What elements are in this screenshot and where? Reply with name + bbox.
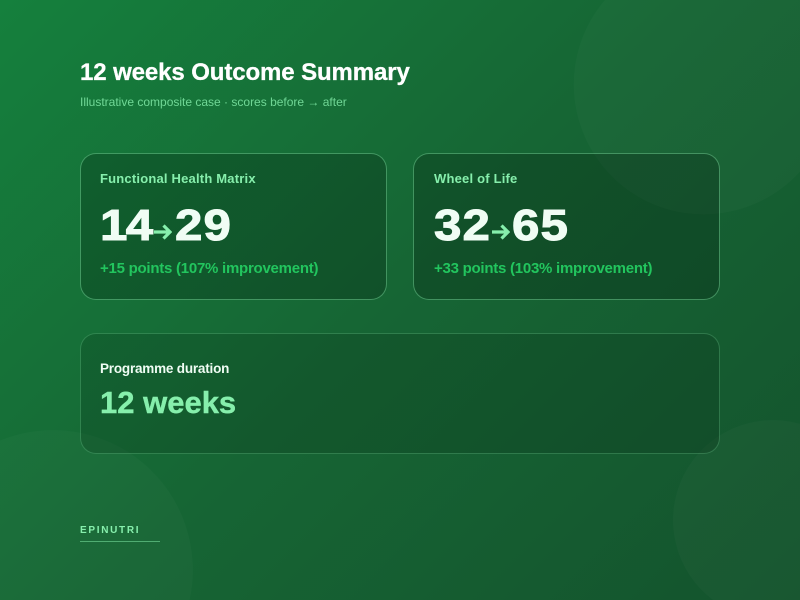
improvement text: +15 points (107% improvement) — [100, 260, 318, 277]
score: 32 to 65: 32 — [434, 201, 491, 250]
score: 14 to 29 — [100, 201, 232, 250]
arrow icon — [492, 224, 510, 240]
brand name: EPINUTRI — [80, 525, 140, 536]
score: 14 to 29: 29 — [175, 201, 232, 250]
duration value: 12 weeks — [100, 385, 236, 420]
panel label: Functional Health Matrix — [100, 171, 256, 186]
score: 32 to 65: 65 — [512, 201, 569, 250]
duration label: Programme duration — [100, 361, 229, 376]
improvement text: +33 points (103% improvement) — [434, 260, 652, 277]
panel: Functional Health Matrix — [80, 153, 387, 300]
panel: Programme duration — [80, 333, 720, 454]
brand footer — [80, 526, 160, 542]
arrow icon — [154, 224, 172, 240]
panel label: Wheel of Life — [434, 171, 518, 186]
subtitle: Illustrative composite case · scores before → after — [80, 95, 347, 109]
score: 14 to 29: 14 — [100, 201, 151, 250]
score: 32 to 65 — [434, 201, 569, 250]
panel: Wheel of Life — [413, 153, 720, 300]
title: 12 weeks Outcome Summary — [80, 59, 410, 86]
